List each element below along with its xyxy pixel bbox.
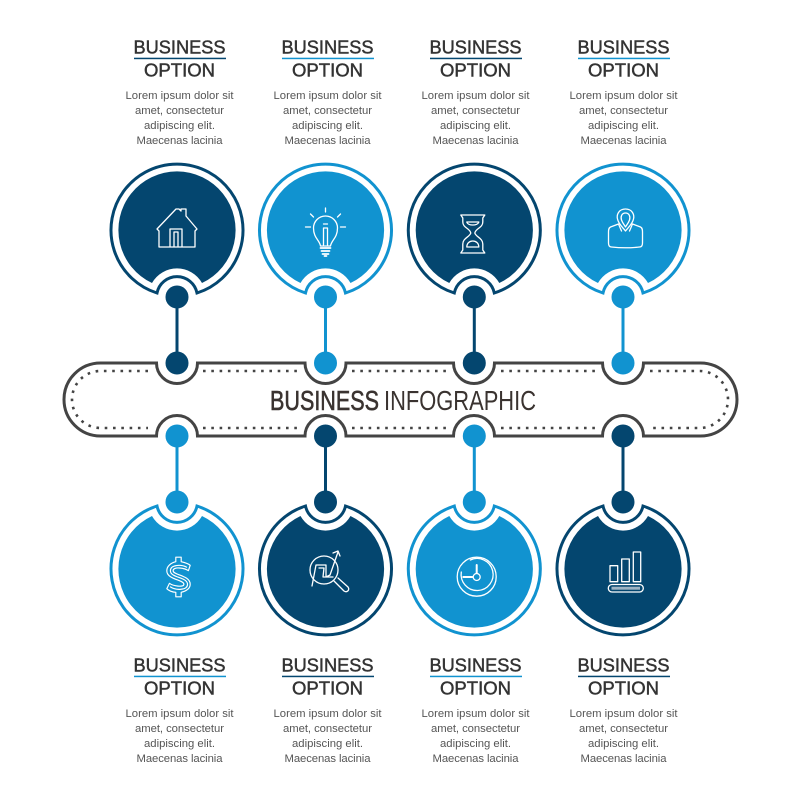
text block <box>422 708 530 765</box>
option 6: magnifier chart, bottom <box>260 425 392 765</box>
text block: adipiscing elit. <box>588 738 659 750</box>
heading: OPTION <box>292 678 363 699</box>
heading: OPTION <box>588 678 659 699</box>
option 8: bar chart, bottom <box>557 425 689 765</box>
heading: OPTION <box>440 678 511 699</box>
text block <box>274 90 382 147</box>
connector <box>612 286 634 374</box>
text block: adipiscing elit. <box>440 738 511 750</box>
node circle <box>557 164 689 293</box>
heading: OPTION <box>292 60 363 81</box>
option 1: house, top <box>111 36 243 374</box>
heading: BUSINESS <box>578 654 670 675</box>
text block: amet, consectetur <box>579 723 668 735</box>
heading: BUSINESS <box>282 654 374 675</box>
heading <box>430 654 522 699</box>
icon: magnifier with chart <box>310 551 349 592</box>
banner dotted inner border <box>72 371 728 428</box>
text block <box>126 708 234 765</box>
connector <box>463 286 485 374</box>
node circle <box>260 506 392 635</box>
text block: Maecenas lacinia <box>136 135 223 147</box>
node circle <box>557 506 689 635</box>
connector <box>612 425 634 513</box>
heading <box>134 36 226 81</box>
central banner <box>64 363 737 436</box>
text block <box>570 90 678 147</box>
icon: hourglass <box>461 215 485 253</box>
heading: BUSINESS <box>282 36 374 57</box>
text block: Maecenas lacinia <box>284 753 371 765</box>
icon: house <box>157 209 197 247</box>
text block: adipiscing elit. <box>144 738 215 750</box>
option 3: hourglass, top <box>408 36 540 374</box>
option 4: person, top <box>557 36 689 374</box>
text block: Lorem ipsum dolor sit <box>126 708 234 720</box>
heading: BUSINESS <box>578 36 670 57</box>
text block: amet, consectetur <box>283 105 372 117</box>
heading <box>430 36 522 81</box>
heading <box>578 36 670 81</box>
text block: amet, consectetur <box>579 105 668 117</box>
text block: Lorem ipsum dolor sit <box>274 708 382 720</box>
heading <box>134 654 226 699</box>
banner outline <box>64 363 737 436</box>
text block: Maecenas lacinia <box>284 135 371 147</box>
heading <box>282 36 374 81</box>
text block: amet, consectetur <box>135 105 224 117</box>
icon: bar chart <box>608 552 643 592</box>
heading: BUSINESS <box>134 36 226 57</box>
text block: adipiscing elit. <box>588 120 659 132</box>
text block <box>422 90 530 147</box>
text block: adipiscing elit. <box>292 738 363 750</box>
heading: BUSINESS <box>430 36 522 57</box>
icon: person <box>608 209 642 248</box>
text block <box>570 708 678 765</box>
text block: adipiscing elit. <box>292 120 363 132</box>
option 2: light bulb, top <box>260 36 392 374</box>
text block: Maecenas lacinia <box>580 753 667 765</box>
connector <box>314 425 336 513</box>
heading: OPTION <box>440 60 511 81</box>
connector <box>166 286 188 374</box>
text block: Lorem ipsum dolor sit <box>570 90 678 102</box>
text block: adipiscing elit. <box>440 120 511 132</box>
text block: amet, consectetur <box>283 723 372 735</box>
text block <box>126 90 234 147</box>
icon: light bulb <box>306 208 346 256</box>
text block: Lorem ipsum dolor sit <box>422 90 530 102</box>
node circle <box>111 164 243 293</box>
icon: dollar sign <box>167 557 190 597</box>
node circle <box>408 164 540 293</box>
heading: OPTION <box>144 60 215 81</box>
node circle <box>260 164 392 293</box>
text block: adipiscing elit. <box>144 120 215 132</box>
node circle <box>408 506 540 635</box>
text block: Maecenas lacinia <box>580 135 667 147</box>
node circle <box>111 506 243 635</box>
text block: Lorem ipsum dolor sit <box>126 90 234 102</box>
text block: Maecenas lacinia <box>432 135 519 147</box>
heading: OPTION <box>588 60 659 81</box>
heading <box>578 654 670 699</box>
banner title: INFOGRAPHIC <box>384 385 536 416</box>
option 7: clock, bottom <box>408 425 540 765</box>
connector <box>314 286 336 374</box>
text block: Maecenas lacinia <box>432 753 519 765</box>
connector <box>463 425 485 513</box>
text block: Lorem ipsum dolor sit <box>422 708 530 720</box>
icon: clock <box>457 557 496 596</box>
heading: BUSINESS <box>134 654 226 675</box>
text block: amet, consectetur <box>431 105 520 117</box>
text block: amet, consectetur <box>431 723 520 735</box>
text block <box>274 708 382 765</box>
option 5: dollar, bottom <box>111 425 243 765</box>
text block: Lorem ipsum dolor sit <box>274 90 382 102</box>
heading: OPTION <box>144 678 215 699</box>
text block: Maecenas lacinia <box>136 753 223 765</box>
connector <box>166 425 188 513</box>
banner title: BUSINESS <box>270 385 379 416</box>
text block: Lorem ipsum dolor sit <box>570 708 678 720</box>
heading: BUSINESS <box>430 654 522 675</box>
text block: amet, consectetur <box>135 723 224 735</box>
heading <box>282 654 374 699</box>
